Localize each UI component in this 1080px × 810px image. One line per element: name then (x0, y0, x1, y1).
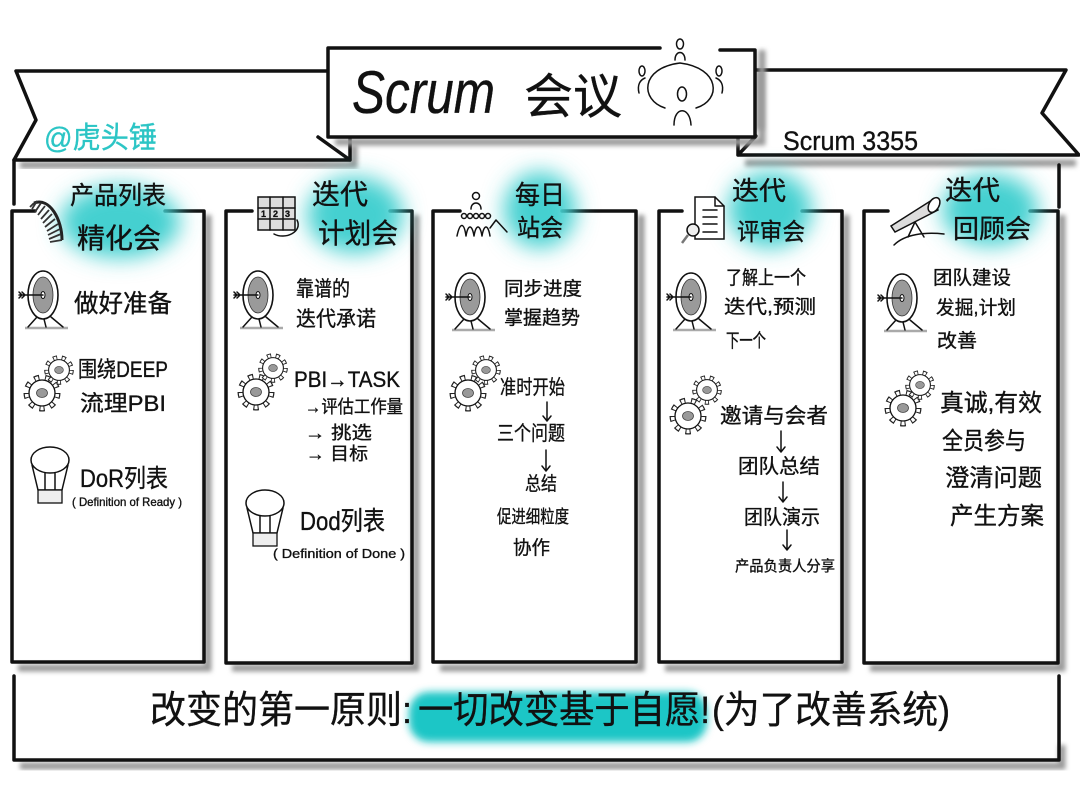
icon: target (19, 271, 68, 328)
process flow text (720, 405, 835, 575)
heading: 迭代 (945, 176, 1000, 206)
goal text: 迭代,预测 (724, 296, 816, 318)
icon: target (234, 271, 283, 328)
heading glow (307, 177, 403, 253)
goal text (724, 267, 816, 352)
icon: comb (30, 201, 62, 242)
icon: telescope (891, 196, 944, 245)
icon: target (446, 273, 495, 330)
artifact text: ( Definition of Ready ) (72, 495, 182, 509)
icon: gears (241, 356, 285, 407)
process text: 围绕DEEP (78, 357, 168, 382)
goal text (504, 278, 582, 329)
process flow text (497, 376, 569, 559)
goal text (296, 278, 376, 331)
heading glow (728, 172, 812, 248)
outer frame sides (14, 160, 1059, 207)
process text (78, 357, 168, 416)
title banner (328, 39, 762, 142)
artifact text: DoR列表 (80, 465, 168, 493)
goal text: 掌握趋势 (504, 307, 580, 329)
artifact text (72, 465, 182, 509)
icon: meeting people (638, 39, 723, 125)
panel: sprint retrospective (864, 174, 1062, 668)
process text: 全员参与 (942, 428, 1026, 455)
heading (732, 176, 805, 246)
heading glow (60, 186, 180, 258)
artifact text: ( Definition of Done ) (273, 546, 405, 561)
process text (940, 390, 1044, 530)
process flow text: 团队总结 (738, 455, 820, 478)
heading glow (942, 174, 1038, 246)
icon: grid: 1 (261, 209, 266, 219)
goal text: 了解上一个 (726, 267, 806, 289)
heading (945, 176, 1031, 244)
panel: sprint review (659, 172, 846, 668)
icon: grid (258, 197, 298, 236)
panel: sprint planning (226, 177, 416, 668)
heading: 站会 (517, 215, 563, 242)
goal text: 迭代承诺 (296, 308, 376, 331)
icon: balloon (246, 490, 284, 546)
icon: balloon (31, 447, 69, 503)
process flow text: 准时开始 (500, 376, 565, 399)
heading: 迭代 (312, 179, 368, 210)
process flow text: 三个问题 (497, 422, 565, 445)
process text: 真诚,有效 (940, 390, 1042, 417)
panel: product backlog refinement (12, 182, 208, 668)
icon: grid: 2 (273, 209, 278, 219)
process text: 产生方案 (950, 503, 1044, 530)
panel: daily standup (433, 172, 641, 668)
heading: 精化会 (77, 223, 161, 254)
icon: gears (888, 373, 932, 423)
artifact text: Dod列表 (300, 506, 385, 536)
goal text: 靠谱的 (296, 278, 350, 301)
heading: 迭代 (732, 176, 786, 206)
highlight (409, 692, 707, 742)
process text: PBI→TASK (294, 367, 400, 392)
heading (70, 182, 166, 254)
author credit: @虎头锤 (44, 122, 157, 155)
heading: 回顾会 (953, 214, 1031, 244)
process flow text: 促进细粒度 (497, 507, 569, 527)
goal text: 下一个 (726, 330, 766, 352)
icon: target (667, 273, 716, 330)
heading: 产品列表 (70, 182, 166, 210)
goal text: 做好准备 (74, 290, 172, 318)
heading (515, 180, 565, 242)
principle text: 改变的第一原则: (150, 690, 412, 732)
heading (312, 179, 398, 249)
process flow text: 邀请与会者 (720, 405, 828, 428)
heading: 每日 (515, 180, 565, 210)
process flow text: 协作 (513, 537, 550, 559)
bottom banner (14, 676, 1062, 766)
principle text: 一切改变基于自愿! (418, 690, 710, 732)
heading glow (504, 172, 576, 248)
scrum 3355 note: Scrum 3355 (783, 126, 918, 156)
right ribbon (738, 70, 1079, 163)
process flow text: 总结 (525, 473, 557, 495)
process flow text: 团队演示 (744, 506, 820, 529)
title text: Scrum (352, 59, 495, 126)
process text: 流理PBI (80, 391, 166, 416)
principle text (150, 690, 950, 732)
icon: gears (453, 358, 498, 408)
icon: target (878, 274, 927, 331)
icon: document with magnifier (682, 197, 724, 243)
icon: team (457, 192, 507, 236)
icon: gears (673, 378, 719, 431)
left ribbon (14, 71, 354, 165)
heading: 评审会 (737, 219, 805, 246)
process text (294, 367, 403, 464)
goal text: 改善 (937, 330, 977, 352)
heading: 计划会 (318, 218, 398, 249)
goal text: 同步进度 (504, 278, 582, 300)
goal text: 发掘,计划 (936, 297, 1016, 319)
artifact text (273, 506, 405, 561)
process text: 澄清问题 (945, 465, 1042, 492)
goal text: 团队建设 (933, 267, 1011, 289)
icon: grid: 3 (285, 209, 290, 219)
title text: 会议 (524, 71, 622, 124)
process text: → 挑选 (305, 423, 372, 443)
principle text: (为了改善系统) (712, 690, 950, 732)
process flow text: 产品负责人分享 (735, 558, 835, 575)
process text: → 目标 (306, 444, 368, 464)
process text: →评估工作量 (305, 397, 403, 417)
icon: gears (27, 358, 71, 408)
title text (352, 59, 622, 126)
goal text (933, 267, 1016, 352)
